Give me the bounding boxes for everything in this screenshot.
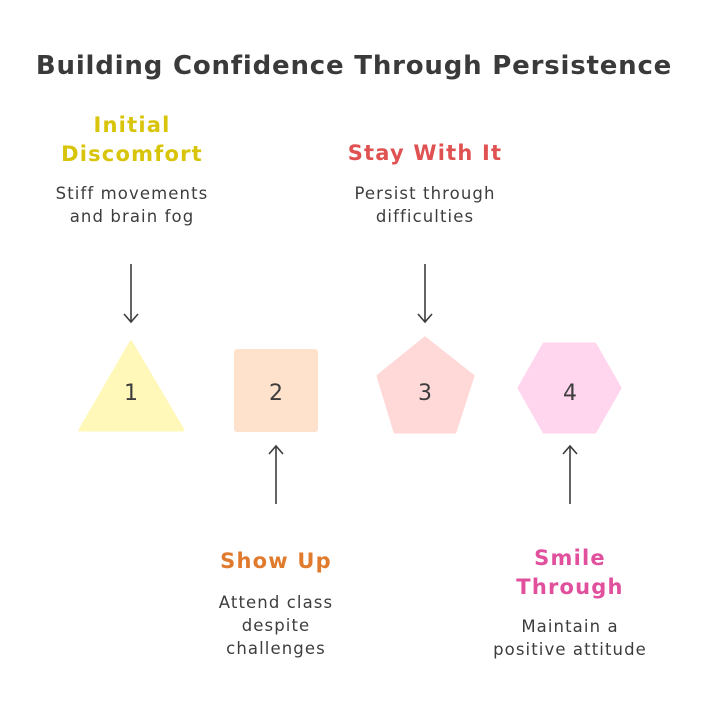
text: stay with it <box>354 184 496 226</box>
shape 4 hexagon: 4 <box>563 381 577 406</box>
arrow 1 <box>124 264 138 322</box>
text: initial discomfort: Stiff movements <box>56 184 208 203</box>
heading: initial discomfort <box>61 113 203 166</box>
text: show up: challenges <box>226 639 326 658</box>
shape 2 square: 2 <box>269 381 283 406</box>
text: smile through: positive attitude <box>493 640 647 659</box>
text: stay with it: Persist through <box>354 184 496 203</box>
text: show up <box>218 593 333 658</box>
arrow 2 <box>269 446 283 504</box>
shape 4 hexagon <box>519 344 620 432</box>
text: show up: despite <box>242 616 310 635</box>
arrow 4 <box>563 446 577 504</box>
shape 1 triangle <box>80 342 183 430</box>
shape 3 pentagon <box>378 338 473 432</box>
heading: stay with it: Stay With It <box>348 141 502 165</box>
heading: smile through <box>516 546 624 599</box>
text: stay with it: difficulties <box>376 207 474 226</box>
shape 1 triangle: 1 <box>124 381 138 406</box>
heading: initial discomfort: Discomfort <box>61 142 203 166</box>
shape 2 square <box>234 349 318 432</box>
heading: smile through: Through <box>516 575 624 599</box>
heading: initial discomfort: Initial <box>94 113 170 137</box>
text: smile through: Maintain a <box>521 617 619 636</box>
shape 3 pentagon: 3 <box>418 381 432 406</box>
text: smile through <box>493 617 647 659</box>
heading: show up: Show Up <box>220 549 332 573</box>
text: show up: Attend class <box>219 593 333 612</box>
text: initial discomfort <box>56 184 208 226</box>
heading: smile through: Smile <box>534 546 606 570</box>
arrow 3 <box>418 264 432 322</box>
title: Building Confidence Through Persistence <box>36 51 672 81</box>
text: initial discomfort: and brain fog <box>70 207 194 226</box>
